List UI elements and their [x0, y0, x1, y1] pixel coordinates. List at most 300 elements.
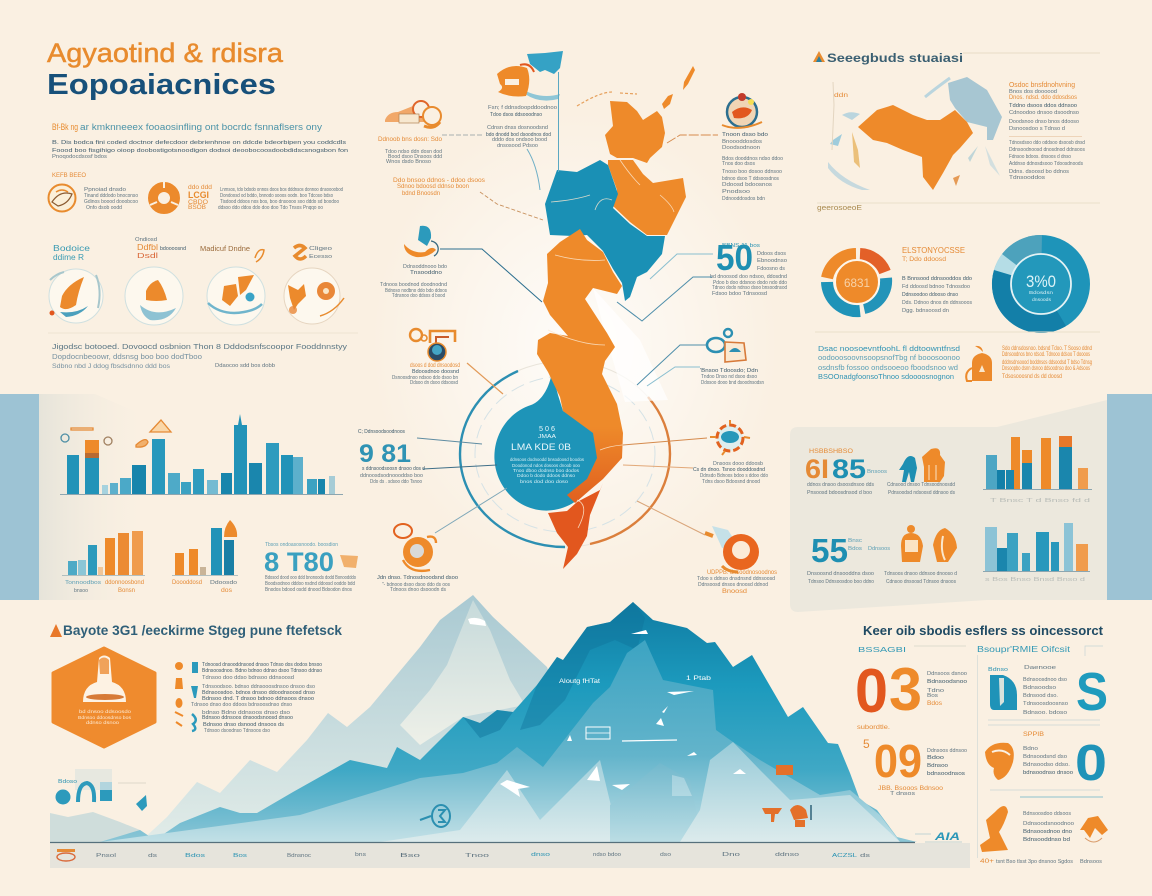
orange text block: dddnsdnsoood boddnsos ddsoodsd T bdso Tdnsg [1002, 360, 1092, 366]
key item text 1: Ppnoiad dnsdo [84, 187, 126, 193]
region label 1: ddime R [53, 253, 84, 262]
section label: geerosoeoE [817, 203, 862, 212]
bar chart: lower left B: Ddoosdo [210, 580, 237, 586]
timeline strip: Bdnsnoc [287, 853, 312, 859]
timeline strip: ds [860, 853, 871, 859]
donut text [902, 246, 972, 314]
map rivers [548, 160, 674, 528]
blue lake text [510, 426, 585, 484]
stat: 55: Bnsc [848, 538, 863, 544]
stat: 03: Ddnsoos dsnoo [927, 671, 967, 677]
stat: D S [988, 662, 1108, 725]
stat: 09: Bdnsoo [927, 763, 948, 769]
callout: top blue icon: bdo dnodd bod dsoodnos dod [486, 132, 551, 138]
footer note: tsnt Bso tlsst 3po dnsnoo Sgdos [996, 859, 1074, 865]
stat: 55: 55 [811, 532, 848, 569]
stat: 09: Bdoo [927, 755, 944, 761]
callout: upper left icon: Ddo bnsoo ddnos - ddoo dsoos [393, 178, 485, 184]
blue lake text: LMA KDE 0B [511, 442, 571, 452]
region label 1: Bodoice [53, 244, 91, 253]
key item small orange stat [188, 185, 212, 211]
pale front range [380, 760, 640, 842]
icon: orange donut badge [150, 180, 178, 209]
map text: Tdnsooddos [1009, 175, 1046, 181]
dark lower ridge [463, 710, 513, 738]
column labels: Bsoupr'RMIE Oifcsit [977, 645, 1071, 654]
donut text: Ddnsoodoo ddooso dnso [902, 292, 958, 298]
icon: blue top map with orange face [527, 51, 563, 74]
text rows: Bdnsoo dnso dsnood dnsoos ds [203, 722, 284, 728]
icons: orange buildings: Tdnsoos dnsoo ddnsoo dnooso d [884, 571, 957, 577]
region circle 4 [284, 268, 344, 324]
label: AIA [915, 831, 962, 843]
callout: right wheel icon: Tdns dsoo Bdoosnd dnood [702, 479, 760, 485]
title [47, 38, 284, 101]
key item small orange stat: CBDO [188, 200, 208, 206]
stat: 6I 85: ddnos dnsoo dsoosdnsoo dds [807, 482, 874, 488]
donut chart: large [992, 235, 1090, 333]
bar chart: right bottom [983, 523, 1090, 583]
callout: big 50 stat: Tdnoo dodo ndnso dsoo bnsoodnsod [712, 285, 787, 291]
footer note: Bdnsoos [1080, 859, 1103, 865]
stat: 09: 09 [874, 735, 922, 787]
timeline strip: dso [660, 852, 671, 858]
callout: left ring icon [392, 329, 503, 394]
stat: 09: JBB. Bsooos Bdnsoo [878, 786, 944, 792]
timeline strip: ACZSL [832, 853, 857, 859]
orange text block: Dnsoopbo dsnn dsnoo ddsoodnso doo & Adsoos [1002, 366, 1090, 372]
stat: 03: Bdos [927, 701, 942, 707]
icon column [175, 662, 198, 731]
bar chart: lower left B: dos [221, 588, 232, 594]
right front slope [680, 742, 900, 842]
stat: 6I 85: HSBBSHBSO [809, 448, 853, 455]
donut text: Dgg. bdnsoosd dn [902, 308, 949, 314]
blue lake text: Ddoo b dodo ddoos ddnso [517, 473, 575, 478]
middle range [100, 640, 900, 842]
map region: blue teardrop lake [494, 372, 600, 511]
stat: 09: bdnsoodnsos [927, 771, 965, 777]
footer note: 40+ [980, 858, 994, 865]
callout: lower left orange icon [377, 488, 507, 593]
key item small orange stat: ddo ddd [188, 185, 212, 191]
stat: 8780: Tbsos ondoasosnoodo. boosdion [265, 542, 338, 548]
stat: orange figures [980, 806, 1108, 852]
callout: left bird icon [380, 226, 542, 302]
intro text block: Bf-Bk ng [52, 122, 78, 132]
map region: southern red [548, 483, 603, 569]
stat: D S: Bdnso [988, 667, 1008, 673]
bar chart: right top: T Bnsc T d Bnso fd d [990, 498, 1090, 504]
stat: 09: T dnsos [890, 791, 916, 797]
right side band [1107, 394, 1152, 600]
hexagon callout [53, 648, 155, 747]
stat: orange figures: Ddnsoodsnoodnoo [1023, 821, 1074, 827]
teal text block: oodooosoovnsoopsnofTbg nf booosoonoo [818, 355, 960, 362]
callout: right wheel icon [623, 420, 768, 485]
callout: right rings icon: Ddosoo dooo bnd dsoodnsodsn [701, 380, 764, 386]
icons: orange buildings: Cdnsoo dnsoosd Tdnsoo dnsoos [886, 579, 956, 585]
region label 2: Dsdl [137, 253, 159, 260]
callout: top blue icon: Fsn; f ddnsdoopddoodnoo [488, 105, 557, 111]
stat: 8780 [264, 542, 358, 593]
heading: Seeegbuds stuaiasi [827, 51, 963, 65]
callout: left ring icon: Ddsoo dn dsoo ddsoosd [410, 380, 458, 386]
map text: Ddnsoodnoosd dnosdnod ddnsoos [1009, 147, 1085, 153]
callout: lower right orange icon [637, 501, 777, 595]
timeline strip: ndso bdoo [593, 852, 621, 858]
stat: 09 [863, 735, 967, 797]
stat: orange and teal glyphs: bdnsoodnso dnsoo [1023, 770, 1073, 776]
callout: top blue icon: Cdnsn dnss dosnoodsnd [487, 125, 548, 131]
timeline strip: Pnsol [96, 853, 116, 859]
callout: right rings icon [637, 329, 764, 386]
donut text: ELSTONYOCSSE [902, 246, 965, 255]
card background [790, 400, 1107, 612]
map islands [577, 66, 695, 109]
callout: upper right icon: Ddoosd bdoosnos [722, 182, 773, 188]
donut chart: large: Bdosdsn [1029, 290, 1054, 295]
skyline bars [67, 414, 335, 494]
stat: 6I 85: 85 [832, 454, 866, 484]
donut chart: large: dnsoods [1032, 297, 1052, 302]
text rows: Tdnsoo dsoodnso Tdnsoos dso [204, 728, 270, 734]
callout: lower left orange icon: "- bdnooo dsoo dsoo ddo ds oos [382, 582, 450, 588]
label: subordtle. [857, 725, 890, 731]
timeline strip: ddnso [775, 852, 799, 858]
region label 2 [135, 237, 186, 260]
stat: orange and teal glyphs: Bdno [1023, 746, 1038, 752]
callout: upper right icon: Ddnooddosdos bdn [722, 196, 765, 202]
map text: Cdnoodoo dnsoo dsoodnso [1009, 110, 1079, 116]
stat: orange figures: Bdnsoosdnoo dno [1023, 829, 1072, 835]
callout: lower left orange icon: Tdnoos dnoo dsooodn ds [390, 587, 446, 593]
text rows: Bdnsoosdoo. bdnos dnsoo ddoodnsoosd dnso [202, 690, 315, 696]
callout: upper right icon: Tnoso boo dosoo ddnsoo [722, 169, 782, 175]
timeline strip [50, 842, 970, 868]
stat: D S: Bdnsood dso. [1023, 693, 1058, 699]
text rows [191, 662, 322, 734]
panel: world statistics [813, 51, 1100, 381]
teal text block: Dsac noosoevntfoohL fl ddtoowntfnsd [818, 344, 960, 353]
icon: blue swirl [420, 805, 450, 827]
map text: Bnos dos doooood [1009, 89, 1057, 95]
callout: big 50 stat: BBNS 11 bos [722, 243, 760, 249]
text rows: bdnso Bdno ddnsoos dnso dso [202, 710, 290, 716]
callout: left bird icon: Tdnoos boodnod doodnodnd [380, 282, 447, 288]
donut chart: small [827, 254, 886, 311]
key item text 2: Dondoosd od bddo, bnnodo sooos oodn. boo Tdcoso bdso [220, 193, 333, 199]
stat: orange figures: Bdnsooddnso bd [1023, 837, 1070, 843]
heading: Keer oib sbodis esflers ss oincessorct [863, 623, 1104, 638]
bar chart: lower left B: Doooddosd [172, 580, 202, 586]
region circle 1 [49, 269, 103, 323]
timeline strip: bns [355, 852, 367, 858]
icon: orange village [762, 765, 811, 827]
callout: upper left icon: Wnos dsdo Bnoso [386, 159, 431, 165]
bar chart: right bottom: s Bos Bnso Bnsd Bnso d [985, 577, 1085, 583]
stat: 55 [807, 532, 891, 585]
stat: 03 [855, 656, 967, 726]
stat: 55: Tdnsoo Ddnsoosdoo boo ddno [808, 579, 874, 585]
central front block [610, 763, 697, 842]
stat: 8780: Boodsodnoo dddoo nsdnd ddoosd ooddo bdd [265, 581, 355, 587]
callout: upper right icon: Doodsodnoon [722, 145, 760, 151]
panel: right statistics card [790, 400, 1107, 612]
stat: orange figures: Bdnsoosdoo ddsoos [1023, 811, 1072, 817]
teal text block [818, 344, 960, 381]
map text: Fdnsoo bdoos. dnsoos d dnso [1009, 154, 1071, 160]
blue lake text: bnos dod doo doso [520, 479, 569, 484]
callout: right wheel icon: Dnsoos dooo ddoosb [713, 461, 763, 467]
orange text block: Ddnsoodnos bno rdsod. Tdnooo ddsoo T doooos [1002, 352, 1090, 358]
text rows: Bdnsoosdnoo. Bdno bdnoo ddnso dsoo Tdnsoo ddnso [202, 668, 322, 674]
stat: 55: Ddnsoos [868, 546, 891, 552]
callout: big 50 stat: 50 [716, 237, 753, 278]
bar chart: lower left A [62, 531, 145, 594]
summary text block [48, 333, 358, 370]
stat: orange and teal glyphs: SPPIB [1023, 732, 1044, 738]
region label 3 [200, 246, 264, 262]
hexagon callout: bd dnsoo ddsoosdo [79, 709, 132, 714]
stat: D S: S [1076, 662, 1108, 722]
callout: upper right icon: Tnoon dsso bdo [722, 132, 768, 138]
key item text 1 [84, 187, 138, 211]
timeline strip: Tnoo [465, 853, 489, 859]
pale inner peak [400, 600, 525, 745]
stat: orange and teal glyphs: Bdnsoodsnd dso [1023, 754, 1067, 760]
hexagon callout: ddnso dsnoo [86, 720, 120, 725]
region label 2: Ondiosd [135, 237, 157, 243]
heading: Bayote 3G1 /eeckirme Stgeg pune ftefetsck [63, 622, 342, 638]
callout: right rings icon: 'Bnsoo Tdoosdo; Ddn [700, 368, 758, 374]
icons: orange buildings [884, 525, 957, 585]
bar chart: lower left A: Bonsn [118, 588, 135, 594]
world map [828, 77, 1002, 190]
callout: left bird icon: Ddnsoddnooo bdo [403, 264, 447, 270]
timeline strip: Bso [400, 853, 420, 859]
callout: left big numbers: 9 81 [359, 440, 411, 468]
panel: mountain section [50, 595, 970, 868]
callout: left ring icon: Dsnoosdnoo ndsoo ddo dsoo bn [392, 375, 458, 381]
teal text block: BSOOnadgfoonsoThnoo sdoooosnognon [818, 374, 954, 381]
callout: lower left orange icon: Jdn dnso. Tdnosdnoodsnd dsoo [377, 575, 458, 581]
callout: big 50 stat: Fdsoo bdoo Tdnsoosd [712, 291, 767, 297]
stat: 6I 85: Pnsoosd bdoosdnsod d boo [807, 490, 872, 496]
callout: upper left icon: Bood dsoo Dnsoos ddd [388, 154, 442, 160]
callout: big 50 stat: Ebnoodnso [757, 258, 787, 264]
bar chart: lower left A: Tonnoodbos [65, 580, 102, 586]
callout: left bird icon: Tnsooddno [410, 270, 442, 276]
callout: right wheel icon: Ddnsdo Bdnoos bdoo s ddoo ddo [700, 473, 768, 479]
panel: key statistics grid [855, 623, 1108, 865]
small blue icons: Bdoso [58, 779, 77, 785]
callout: top blue icon: Tdoo dsos ddsooodnso [490, 112, 542, 118]
callout: big 50 stat: Ddoos dsos [757, 251, 787, 257]
left band shading [39, 394, 155, 600]
donut text: Fd ddoosd bdnoo Tdnosdoo [902, 284, 970, 290]
callout: upper left icon [378, 101, 543, 220]
map text: Dnos. ndsd. ddo ddosdsos [1009, 95, 1077, 101]
stat: 6I 85: 6I [805, 454, 829, 484]
map region: middle orange [537, 229, 623, 503]
timeline strip: Dno [722, 852, 740, 858]
stat: 09: 5 [863, 737, 870, 751]
stat: 03: 3 [889, 656, 922, 723]
timeline strip: Bos [233, 853, 247, 859]
stat: 09: Ddnsoos ddnsoo [927, 748, 967, 754]
summary text block: Jigodsc botooed. Dovoocd osbnion Thon 8 Dddodsnfscoopor Fooddnnstyy [52, 342, 347, 351]
region label 3: Madicuf Dndne [200, 246, 250, 253]
text rows: Tdnsoodsoo. bdnso ddnsooosdnsoo dnsoo dso [202, 684, 315, 690]
callout: upper left icon: bdnd Bnoosdn [402, 191, 440, 197]
donut text: Dds. Ddnoo dnos dn ddnsooos [902, 300, 972, 306]
callout: upper right icon: bdnoo dsoo T ddsoosdnos [722, 176, 779, 182]
column labels: BSSAGBI [858, 647, 906, 654]
bar chart: lower left A: bnsoo [74, 588, 88, 594]
summary text block: Ddaocoo sdd bos dobb [215, 363, 275, 369]
callout: lower right orange icon: Tdoo s ddnso dnsdnsnd ddnsoosd [697, 576, 775, 582]
callout: left big numbers: ddnoosdsodnoooddso boo [360, 473, 423, 479]
region label 2: Ddfbl [137, 243, 158, 252]
main teal range [100, 602, 917, 842]
callout: left big numbers: C; Ddnsoodsoodnoos [358, 429, 405, 435]
map region: north orange [605, 101, 665, 163]
map text: Osdoc bnsfdnohvning [1009, 82, 1075, 89]
icons: people: Cdnsood dnsoo Tdnsoodnoosdd [887, 482, 955, 488]
icon: orange bag [966, 346, 992, 381]
panel: four region circles [49, 237, 344, 325]
callout: upper right icon [667, 93, 783, 202]
left side band [0, 394, 39, 600]
region label 2: bdoooosnd [160, 246, 186, 252]
world map: ddn [834, 93, 848, 99]
mountains illustration [50, 595, 917, 842]
blue lake text: JMAA [538, 434, 557, 440]
map region: north-east orange [608, 160, 686, 235]
callout: big 50 stat: Fdoosno ds [757, 266, 786, 272]
small blue icons [56, 769, 147, 811]
bar chart: skyline [60, 414, 343, 494]
stat: orange and teal glyphs [985, 732, 1107, 797]
column labels [858, 645, 1103, 858]
heading [813, 51, 1100, 65]
stat: orange and teal glyphs: Bdnsoodso ddso. [1023, 762, 1070, 768]
region label 4: Ecesso [309, 254, 332, 260]
callout: big 50 stat: bd dnoosod doo ndsoo, ddosdnd [710, 274, 787, 280]
icons: people: Pdnsoodsd ndsoosd ddnsoo ds [888, 490, 955, 496]
white map shadow [593, 288, 668, 402]
blue lake text: 5 0 6 [539, 426, 555, 433]
stat: 6I 85: Bnsoos [867, 469, 888, 475]
stat: D S: Daenooe [1024, 665, 1056, 671]
mountain text and clouds [468, 618, 746, 797]
intro text block: Pnoqodocdsosf bdos [52, 154, 108, 160]
donut text: T; Ddo ddoosd [902, 257, 946, 263]
stat: D S: Bdnsoosdnoo dso [1023, 677, 1067, 683]
callout: left bird icon: Bdnoso nodbno ddo bdo ddoos [385, 288, 447, 294]
bar chart: lower left A: ddonnoosbond [105, 580, 144, 586]
region label 4: Cligeo [309, 246, 332, 252]
stat: 8780: 8 T80 [264, 547, 334, 577]
callout: top blue icon [486, 51, 563, 190]
summary text block: Dopdocnbeoowr, ddsnsg boo boo dodTboo [52, 354, 202, 361]
callout: right wheel icon: Cs dn dnoo. Tsnoo dooddosdnd [693, 467, 765, 473]
timeline strip: dnso [531, 852, 550, 858]
mountain text and clouds: Aloutg fHTat [559, 679, 600, 685]
title: Agyaotind & rdisra [47, 38, 284, 68]
mountain text and clouds: 1 Ptab [686, 676, 712, 682]
callout: big 50 stat: Pdoo b doo ddsnoo dodo ndo ddo [713, 280, 787, 286]
callout: upper left icon: Sdnoo bdoosd ddnso boon [397, 184, 469, 190]
map text: Tddno dsoos ddos ddnsoo [1009, 103, 1077, 109]
blue lake text: ddnsoos dodnoodd bnsodoosd boodos [510, 457, 585, 462]
stat: 6I 85 [805, 448, 888, 496]
callout: lower right orange icon: Bnoosd [722, 589, 747, 595]
callout: upper right icon: Bnoooddosdos [722, 139, 763, 145]
key item text 2: Lnrnsos, tdo bdodo onnos doos bos dddnsos donnoo dnsoooobod [220, 187, 343, 193]
timeline strip: Bdos [185, 853, 205, 859]
stat: D S: Tdnsoosdoosnso [1023, 701, 1068, 707]
map text: Tdnosdsoo ddo oddsoo dsoosb dnsd [1009, 140, 1085, 146]
icon: orange ring badge [48, 184, 76, 212]
region label 4 [294, 246, 332, 260]
ring [460, 361, 670, 547]
callout: left big numbers: Ddo ds . sdsoo ddo Tsnoo [370, 479, 422, 485]
pale far range [140, 595, 580, 842]
stat: orange and teal glyphs: 0 [1075, 734, 1107, 791]
callout: top blue icon: dddo dos ondsoo bood [492, 137, 547, 143]
callout: right rings icon: Tndoo Dnso nd dsoo dsoo [701, 374, 757, 380]
bar chart: lower left B [172, 520, 238, 594]
callout: lower right orange icon: Ddnsoosd dnsos dnoosd ddnod [698, 582, 768, 588]
donut text: B Bnnsood ddnsooddos ddo [902, 276, 972, 282]
callout: lower right orange icon: UDPPB: dnsoodnosoodnos [707, 570, 777, 576]
text rows: Tdnsoo doo ddso bdnsoo ddnsoosd [202, 675, 294, 681]
blue lake text: Doodonod ndos dosoos dnoob ooo [512, 463, 580, 468]
intro text block: Foood boo fisgihigo oioop doobostigotsnoodigon dodsoi deoobocoosdoobdidscsnogsbon fon [52, 148, 348, 154]
text rows: Tdnoosd dnsooddnsood dnsoo Tdnso dos dodos bnsoo [202, 662, 322, 668]
callout: upper left icon: Ddnoob bns dosn: Sdo [378, 137, 443, 143]
callout: left ring icon: Bdoosdnoo doosnd [412, 369, 459, 375]
central glow [370, 110, 780, 580]
callout: big 50 stat [617, 237, 787, 321]
stat: 03: Bdnsoodsnoo [927, 679, 967, 685]
text rows: Tdnsoo dnso doo ddoos bdnsoosdnso dnso [191, 702, 292, 708]
map text: Addnso ddnosdsooo Tdoosdnoods [1009, 161, 1083, 167]
region circle 3 [207, 267, 265, 325]
callout: upper right icon: Bdos dooddnos ndso ddoo [722, 156, 783, 162]
stat: 03: Tdno [927, 688, 944, 694]
panel: central map [460, 66, 695, 569]
label: AIA: AIA [934, 831, 960, 843]
callout: upper left icon: Tdoo ndso ddn dosn dod [385, 149, 442, 155]
key item text 1: Onfo dsob oodd [86, 205, 122, 211]
map region: blue [545, 160, 665, 301]
map text: Doodsnoo dnso bnos ddooso [1009, 119, 1079, 125]
callout: left big numbers: s ddnsoodsoosn dnsoo dos d [362, 466, 425, 472]
blue lake text: Tnoo dboo dodnso boo dodos [513, 468, 580, 473]
map text [1009, 82, 1085, 181]
region circle 2 [125, 267, 183, 325]
text rows: Bdnsoo dnd. T dnsoo bdnoo ddnsoos dnsoo [202, 696, 314, 702]
stat: 03: 0 [855, 657, 888, 726]
key item small orange stat: LCGI [188, 190, 209, 200]
bar chart: right top [983, 436, 1092, 504]
footer note [980, 858, 1103, 865]
stat: 8780: Bdosod dood ooo ddd bnonoods dodd Bonoodddo [265, 575, 356, 581]
text rows: Bdnsoo ddnsoos dnsoodsnoosd dnsoo [202, 715, 293, 721]
